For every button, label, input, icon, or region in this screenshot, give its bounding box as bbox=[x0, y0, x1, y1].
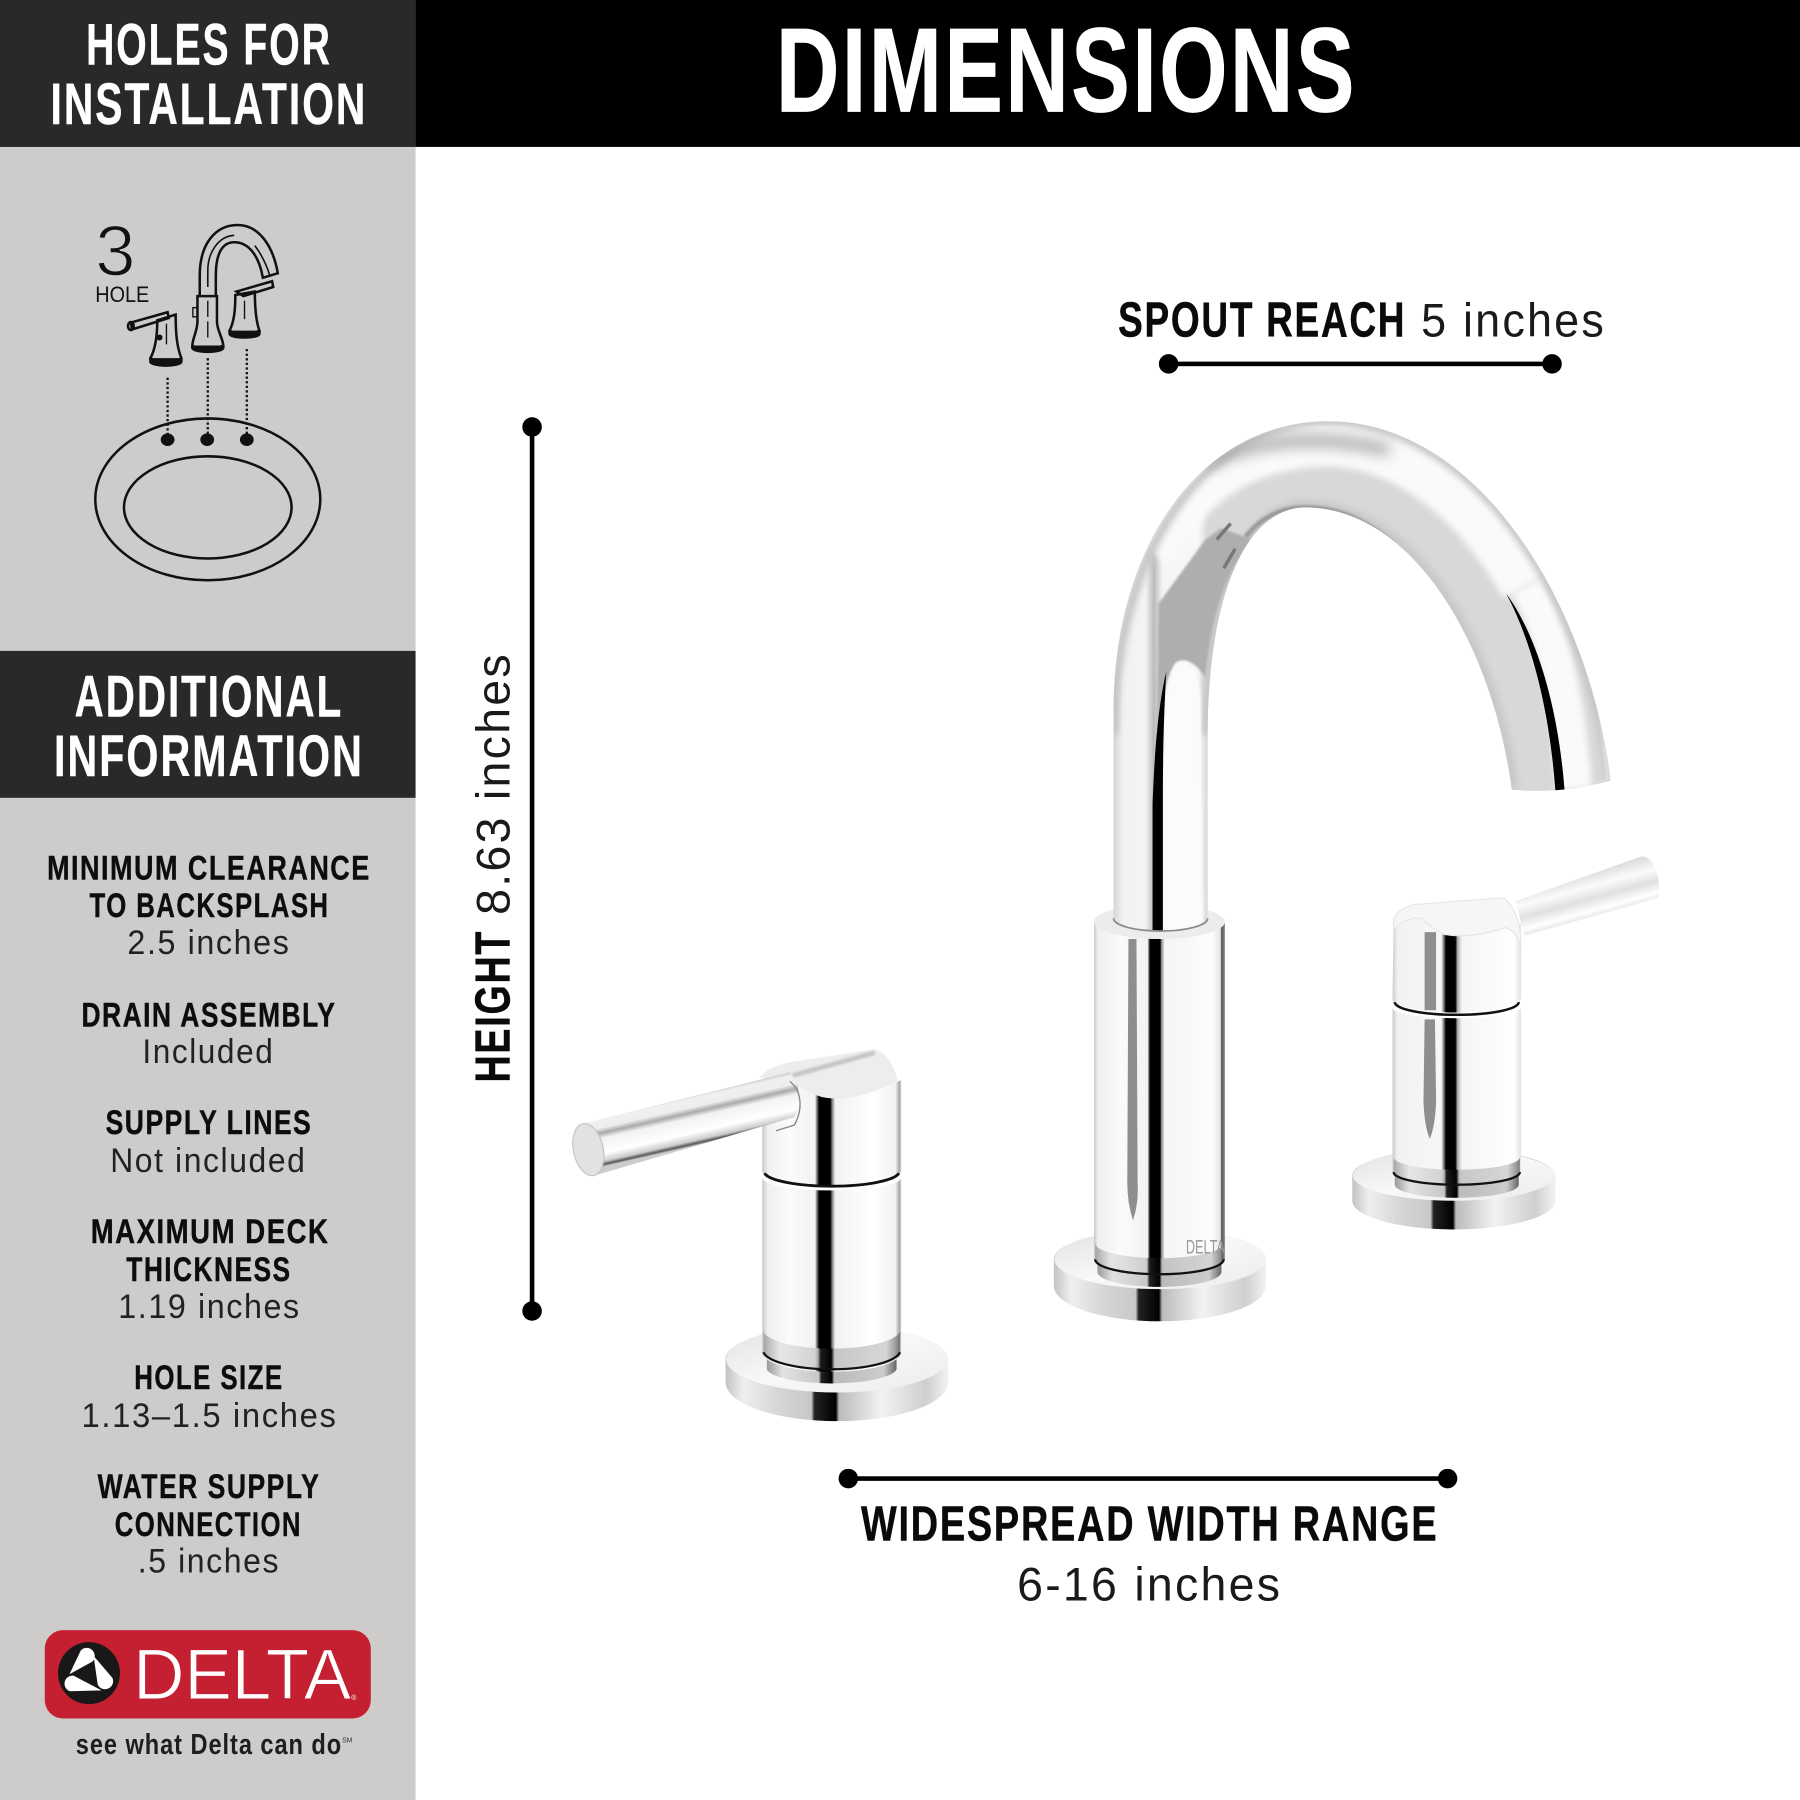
maker mark: DELTA bbox=[1186, 1237, 1225, 1259]
column reflection stripe bbox=[1127, 939, 1138, 1220]
faucet: right handle bbox=[1352, 856, 1659, 1229]
text block: maximum deck thickness: MAXIMUM DECK bbox=[91, 1213, 329, 1251]
logo: Delta: ® bbox=[351, 1694, 356, 1702]
dimension: spout reach line bbox=[1159, 354, 1562, 374]
text block: water supply connection bbox=[98, 1468, 320, 1581]
right ring line bbox=[1394, 1172, 1520, 1185]
heading: additional information: ADDITIONAL bbox=[75, 664, 343, 729]
right handle lower body bbox=[1392, 1008, 1521, 1185]
dimension: widespread label: 6-16 inches bbox=[1017, 1557, 1282, 1610]
left handle upper body bbox=[762, 1080, 901, 1186]
label: 3 hole bbox=[95, 213, 149, 307]
dimension: widespread label: WIDESPREAD WIDTH RANGE bbox=[861, 1497, 1438, 1552]
text block: minimum clearance: MINIMUM CLEARANCE bbox=[47, 849, 371, 887]
left ring line bbox=[763, 1352, 900, 1369]
text block: supply lines: Not included bbox=[110, 1142, 307, 1180]
dimension: height label bbox=[466, 652, 521, 1083]
text block: maximum deck thickness: THICKNESS bbox=[126, 1251, 292, 1289]
text block: minimum clearance bbox=[47, 849, 371, 962]
dimension: height line bbox=[522, 417, 542, 1321]
right upper reflection bbox=[1425, 932, 1436, 1010]
text block: water supply connection: WATER SUPPLY bbox=[98, 1468, 320, 1506]
right lever bbox=[1515, 856, 1659, 936]
right lower reflection bbox=[1423, 1019, 1436, 1139]
right collar under body bbox=[1395, 1172, 1519, 1198]
center column lower ring bbox=[1095, 1243, 1224, 1274]
heading: holes for installation bbox=[0, 0, 416, 147]
column ring line bbox=[1095, 1259, 1224, 1274]
icon: small right handle bbox=[230, 281, 273, 338]
left collar under body bbox=[767, 1352, 897, 1383]
text block: minimum clearance: 2.5 inches bbox=[127, 924, 290, 962]
heading: holes for installation: HOLES FOR bbox=[86, 12, 332, 77]
icon: sink basin bbox=[95, 418, 320, 580]
text block: hole size bbox=[82, 1359, 338, 1435]
text block: drain assembly bbox=[82, 996, 336, 1071]
right base disc bbox=[1352, 1149, 1555, 1229]
dimension: widespread label bbox=[861, 1497, 1438, 1610]
dimension: height label: HEIGHT bbox=[466, 930, 521, 1083]
label: 3 hole: HOLE bbox=[95, 282, 149, 307]
text block: minimum clearance: TO BACKSPLASH bbox=[90, 887, 329, 925]
text block: maximum deck thickness bbox=[91, 1213, 329, 1326]
left handle bottom ring bbox=[763, 1332, 900, 1369]
text block: water supply connection: .5 inches bbox=[138, 1543, 280, 1581]
tagline: SM bbox=[342, 1738, 353, 1745]
right handle upper body bbox=[1392, 916, 1521, 1012]
logo: Delta bbox=[45, 1630, 371, 1718]
center collar under column bbox=[1097, 1259, 1221, 1287]
text block: hole size: HOLE SIZE bbox=[134, 1359, 284, 1397]
text block: drain assembly: DRAIN ASSEMBLY bbox=[82, 996, 336, 1034]
spout base edge bbox=[1114, 918, 1208, 931]
panel: left sidebar bbox=[0, 0, 416, 1800]
left cap highlight bbox=[792, 1053, 875, 1076]
text block: maximum deck thickness: 1.19 inches bbox=[118, 1288, 301, 1326]
left lever tip bbox=[568, 1121, 608, 1179]
left lever bbox=[582, 1072, 800, 1176]
left lever shoulder edge bbox=[776, 1081, 800, 1131]
dotted guide lines bbox=[168, 349, 247, 436]
tagline: see what Delta can do bbox=[76, 1729, 342, 1761]
left handle lower body bbox=[762, 1178, 901, 1372]
text block: supply lines bbox=[106, 1104, 312, 1180]
right separation line bbox=[1395, 1002, 1519, 1015]
left base disc bbox=[726, 1326, 948, 1421]
heading: additional information: INFORMATION bbox=[54, 724, 364, 789]
faucet: center column bbox=[1054, 905, 1266, 1321]
text block: water supply connection: CONNECTION bbox=[115, 1506, 302, 1544]
center column body bbox=[1094, 923, 1225, 1274]
left separation line bbox=[765, 1173, 899, 1186]
icon: small left handle bbox=[128, 312, 181, 366]
logo: Delta: DELTA bbox=[133, 1636, 352, 1715]
text block: drain assembly: Included bbox=[142, 1033, 274, 1071]
heading: holes for installation: INSTALLATION bbox=[51, 72, 367, 137]
right handle top cap bbox=[1394, 898, 1521, 947]
icon: three hole faucet and sink diagram bbox=[95, 213, 320, 580]
icon: small faucet spout bbox=[192, 225, 278, 352]
dimension: spout reach label: 5 inches bbox=[1421, 293, 1606, 346]
dimension: spout reach label: SPOUT REACH bbox=[1118, 292, 1406, 347]
right handle bottom ring bbox=[1394, 1157, 1520, 1185]
label: 3 hole: 3 bbox=[95, 213, 135, 292]
faucet: left handle bbox=[568, 1049, 948, 1421]
center column collar bbox=[1094, 905, 1225, 939]
faucet: spout bbox=[1114, 421, 1611, 936]
dimension: widespread line bbox=[839, 1469, 1457, 1488]
title banner: DIMENSIONS: DIMENSIONS bbox=[776, 4, 1357, 137]
dimension: height label: 8.63 inches bbox=[467, 652, 520, 915]
icon: drilled holes bbox=[161, 433, 254, 446]
left handle top cap bbox=[760, 1049, 898, 1098]
text block: hole size: 1.13–1.5 inches bbox=[82, 1397, 338, 1435]
center base disc bbox=[1054, 1229, 1266, 1321]
heading: additional information bbox=[0, 651, 416, 798]
title banner: DIMENSIONS bbox=[416, 0, 1800, 147]
text block: supply lines: SUPPLY LINES bbox=[106, 1104, 312, 1142]
